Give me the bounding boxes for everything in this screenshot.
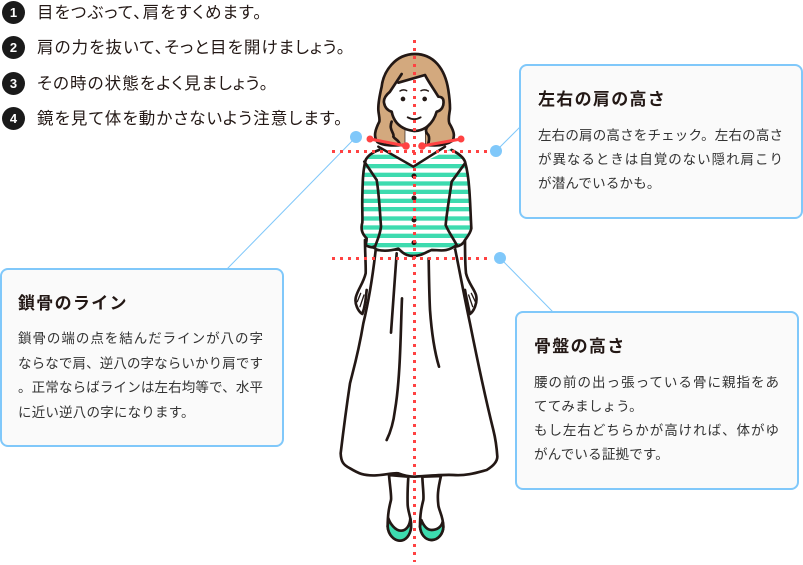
body text: に近い逆八の字になります。 bbox=[18, 405, 195, 420]
body text bbox=[534, 375, 779, 462]
hair bbox=[375, 54, 454, 145]
step 2: 肩の力を抜いて、そっと目を開けましょう。 bbox=[37, 39, 346, 57]
step 1 bbox=[2, 1, 263, 24]
body text: ててみましょう。 bbox=[534, 399, 643, 414]
panel: collarbone line bbox=[0, 268, 284, 447]
step 1: 目をつぶって、肩をすくめます。 bbox=[37, 4, 263, 22]
body text: もし左右どちらかが高ければ、体がゆ bbox=[534, 423, 779, 438]
step 3: その時の状態をよく見ましょう。 bbox=[37, 75, 269, 93]
body text: が潜んでいるかも。 bbox=[538, 176, 661, 191]
step 1: 1 bbox=[10, 4, 17, 20]
body text: 鎖骨の端の点を結んだラインが八の字 bbox=[18, 331, 263, 346]
skirt pleats bbox=[387, 253, 439, 440]
collar bbox=[378, 147, 445, 167]
sleeve outlines bbox=[362, 150, 379, 248]
panel: pelvis height bbox=[515, 311, 799, 490]
step 2: 2 bbox=[10, 40, 17, 54]
buttons bbox=[411, 173, 416, 245]
illustration: standing woman with posture guide lines bbox=[227, 40, 553, 562]
body text: がんでいる証拠です。 bbox=[534, 447, 669, 462]
body text: 。正常ならばラインは左右均等で、水平 bbox=[18, 380, 263, 395]
body text: ならなで肩、逆八の字ならいかり肩です bbox=[18, 356, 263, 371]
face bbox=[384, 74, 444, 131]
arms and hands bbox=[355, 240, 476, 314]
heading: 骨盤の高さ bbox=[534, 337, 626, 356]
step 4: 鏡を見て体を動かさないよう注意します。 bbox=[37, 110, 343, 128]
hair strands bbox=[391, 122, 430, 143]
shoes bbox=[388, 518, 411, 541]
skirt bbox=[341, 248, 497, 477]
body text: 左右の肩の高さをチェック。左右の高さ bbox=[538, 128, 783, 143]
body text: 腰の前の出っ張っている骨に親指をあ bbox=[534, 375, 779, 390]
figure bbox=[341, 54, 497, 541]
collarbone markers left bbox=[366, 136, 410, 150]
body text: が異なるときは自覚のない隠れ肩こり bbox=[538, 152, 783, 167]
heading: 鎖骨のライン bbox=[18, 294, 128, 313]
striped blouse bbox=[358, 146, 475, 256]
connector lines bbox=[227, 127, 553, 312]
step 4: 4 bbox=[10, 110, 17, 126]
body text bbox=[18, 331, 263, 420]
neck bbox=[385, 123, 445, 165]
red posture guide lines bbox=[332, 40, 492, 562]
step 3 bbox=[2, 72, 269, 95]
numbered instruction list bbox=[2, 1, 346, 130]
collarbone markers right bbox=[418, 136, 464, 150]
eyes and brows bbox=[400, 90, 428, 101]
heading: 左右の肩の高さ bbox=[538, 90, 666, 109]
body text bbox=[538, 128, 783, 191]
blouse hem bbox=[373, 245, 457, 256]
panel: shoulder height bbox=[519, 64, 803, 219]
step 3: 3 bbox=[10, 76, 17, 90]
green stripes bbox=[358, 146, 475, 256]
legs bbox=[388, 475, 411, 541]
smile bbox=[408, 117, 421, 119]
blue anchor dots bbox=[350, 131, 506, 264]
